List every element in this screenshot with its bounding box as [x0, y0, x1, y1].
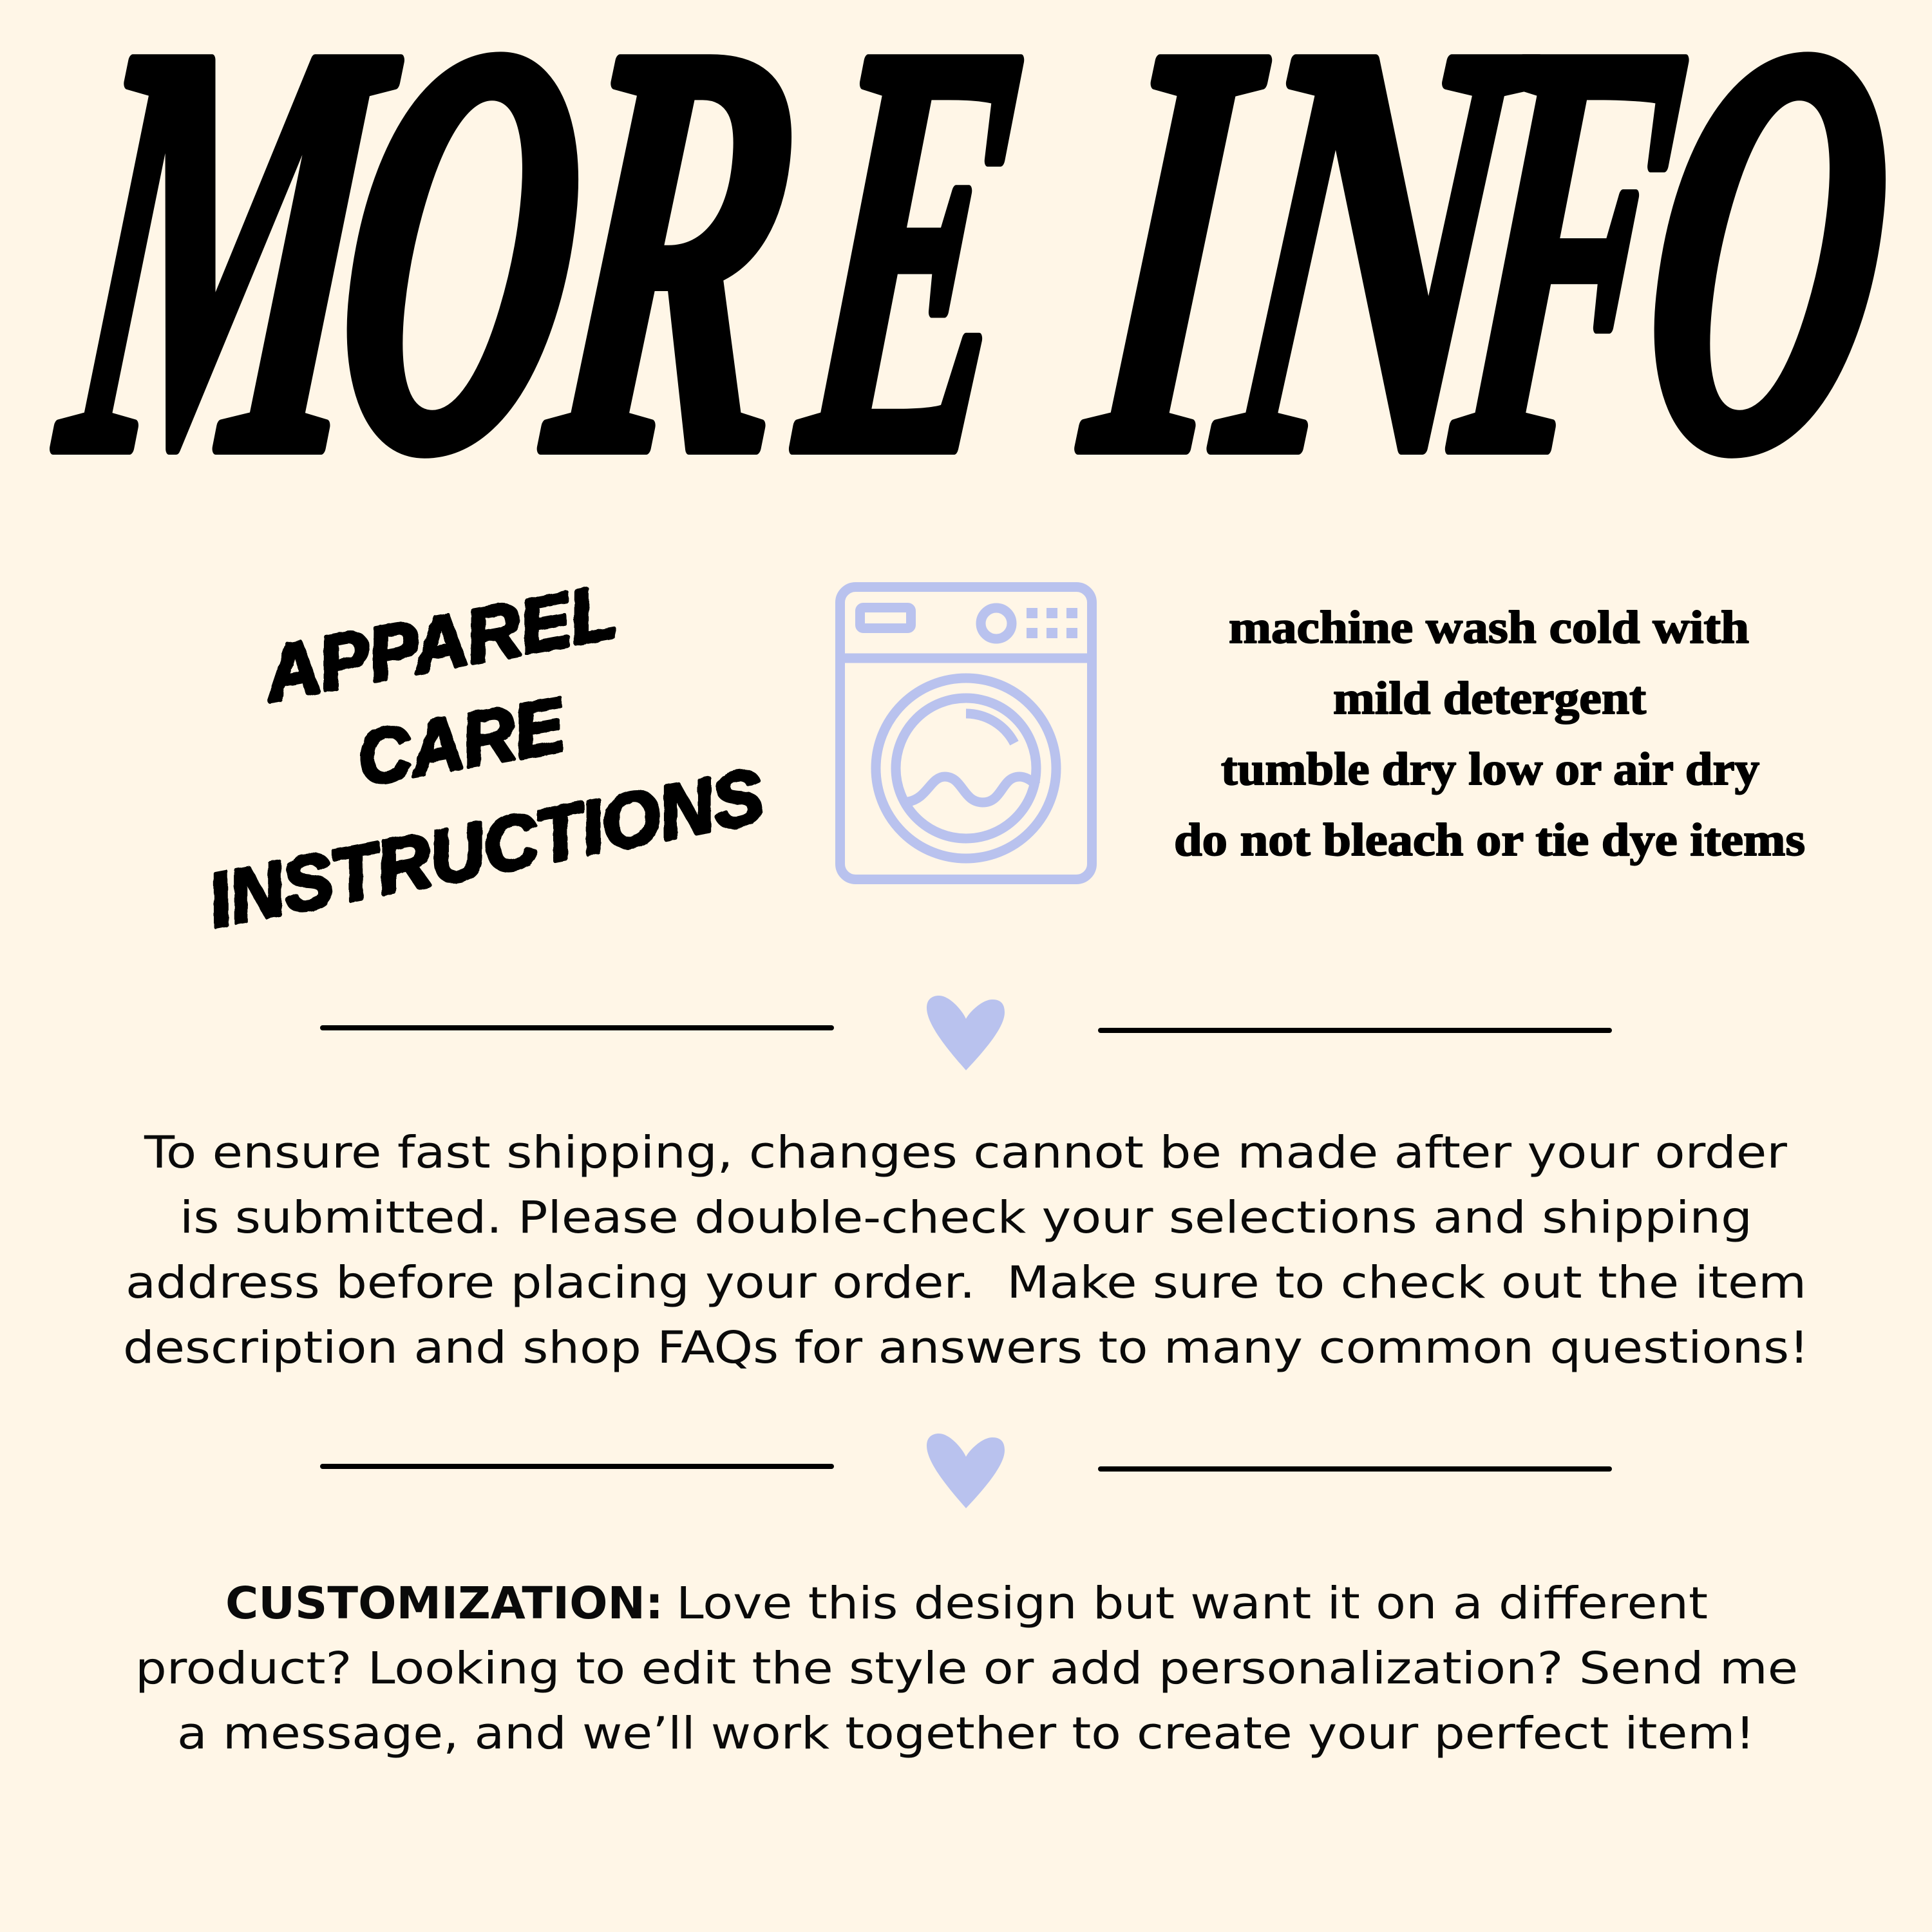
heading: apparel care instructions: CARE	[351, 682, 573, 802]
divider 1: left line	[320, 1025, 834, 1030]
text block: care instructions	[1174, 601, 1805, 866]
text block: customization: Love this design but want it on a different	[676, 1578, 1708, 1629]
icon: heart 2	[927, 1434, 1005, 1508]
text block: customization: product? Looking to edit the style or add personalization? Send me	[135, 1643, 1798, 1694]
icon: heart 1	[927, 996, 1005, 1070]
text block: shipping notice: is submitted. Please double-check your selections and shipping	[180, 1192, 1752, 1244]
text block: care instructions: mild detergent	[1333, 672, 1646, 724]
title: MORE INFO	[39, 0, 1917, 576]
text block: customization: a message, and we’ll work together to create your perfect item!	[177, 1708, 1755, 1759]
text block: care instructions: do not bleach or tie dye items	[1174, 814, 1805, 866]
divider 2: right line	[1098, 1466, 1612, 1472]
text block: shipping notice: description and shop FAQs for answers to many common questions!	[123, 1322, 1809, 1374]
divider 1: right line	[1098, 1028, 1612, 1033]
divider 2: left line	[320, 1464, 834, 1469]
text block: shipping notice: To ensure fast shipping, changes cannot be made after your order	[144, 1127, 1788, 1179]
text block: care instructions: tumble dry low or air dry	[1221, 743, 1759, 795]
heading: apparel care instructions: APPAREL	[256, 569, 623, 717]
text block: shipping notice: address before placing your order. Make sure to check out the item	[126, 1257, 1806, 1309]
heading: apparel care instructions	[202, 569, 770, 944]
text block: shipping notice	[123, 1127, 1809, 1374]
heading: apparel care instructions: INSTRUCTIONS	[202, 753, 770, 944]
text block: care instructions: machine wash cold with	[1229, 601, 1749, 653]
text block: customization: CUSTOMIZATION:	[225, 1578, 663, 1629]
text block: customization	[135, 1578, 1798, 1759]
icon: washing machine	[840, 587, 1092, 880]
